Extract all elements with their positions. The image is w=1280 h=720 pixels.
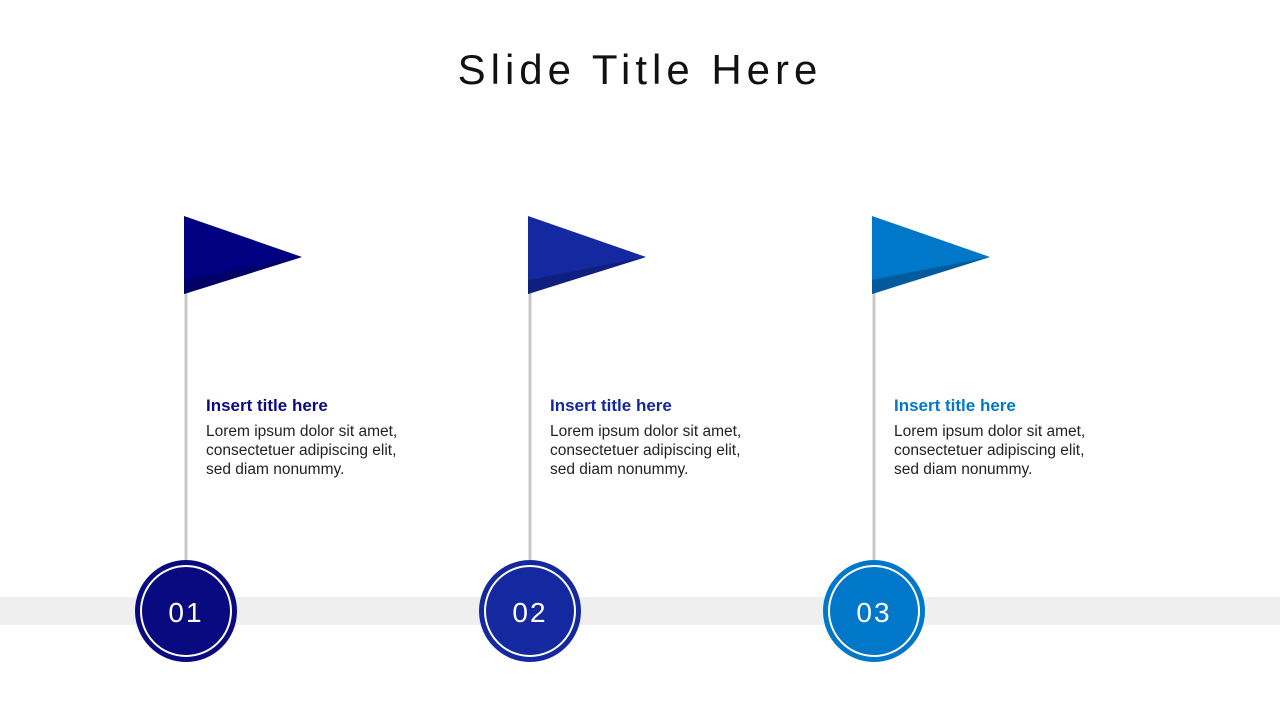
- marker 02: [479, 216, 646, 662]
- text block 3: Lorem ipsum dolor sit amet, consectetuer adipiscing elit, sed diam nonummy.: [894, 423, 1085, 478]
- marker 03: [823, 216, 990, 662]
- text block 1: Lorem ipsum dolor sit amet, consectetuer adipiscing elit, sed diam nonummy.: [206, 423, 397, 478]
- text block 2: Lorem ipsum dolor sit amet, consectetuer adipiscing elit, sed diam nonummy.: [550, 423, 741, 478]
- title: Slide Title Here: [458, 46, 822, 93]
- text block 3: [894, 396, 1085, 478]
- marker 02: 02: [512, 597, 548, 628]
- timeline band: [0, 597, 1280, 625]
- text block 2: Insert title here: [550, 396, 672, 415]
- text block 1: Insert title here: [206, 396, 328, 415]
- text block 2: [550, 396, 741, 478]
- marker 03: 03: [856, 597, 892, 628]
- marker 01: [135, 216, 302, 662]
- marker 01: 01: [168, 597, 204, 628]
- text block 1: [206, 396, 397, 478]
- text block 3: Insert title here: [894, 396, 1016, 415]
